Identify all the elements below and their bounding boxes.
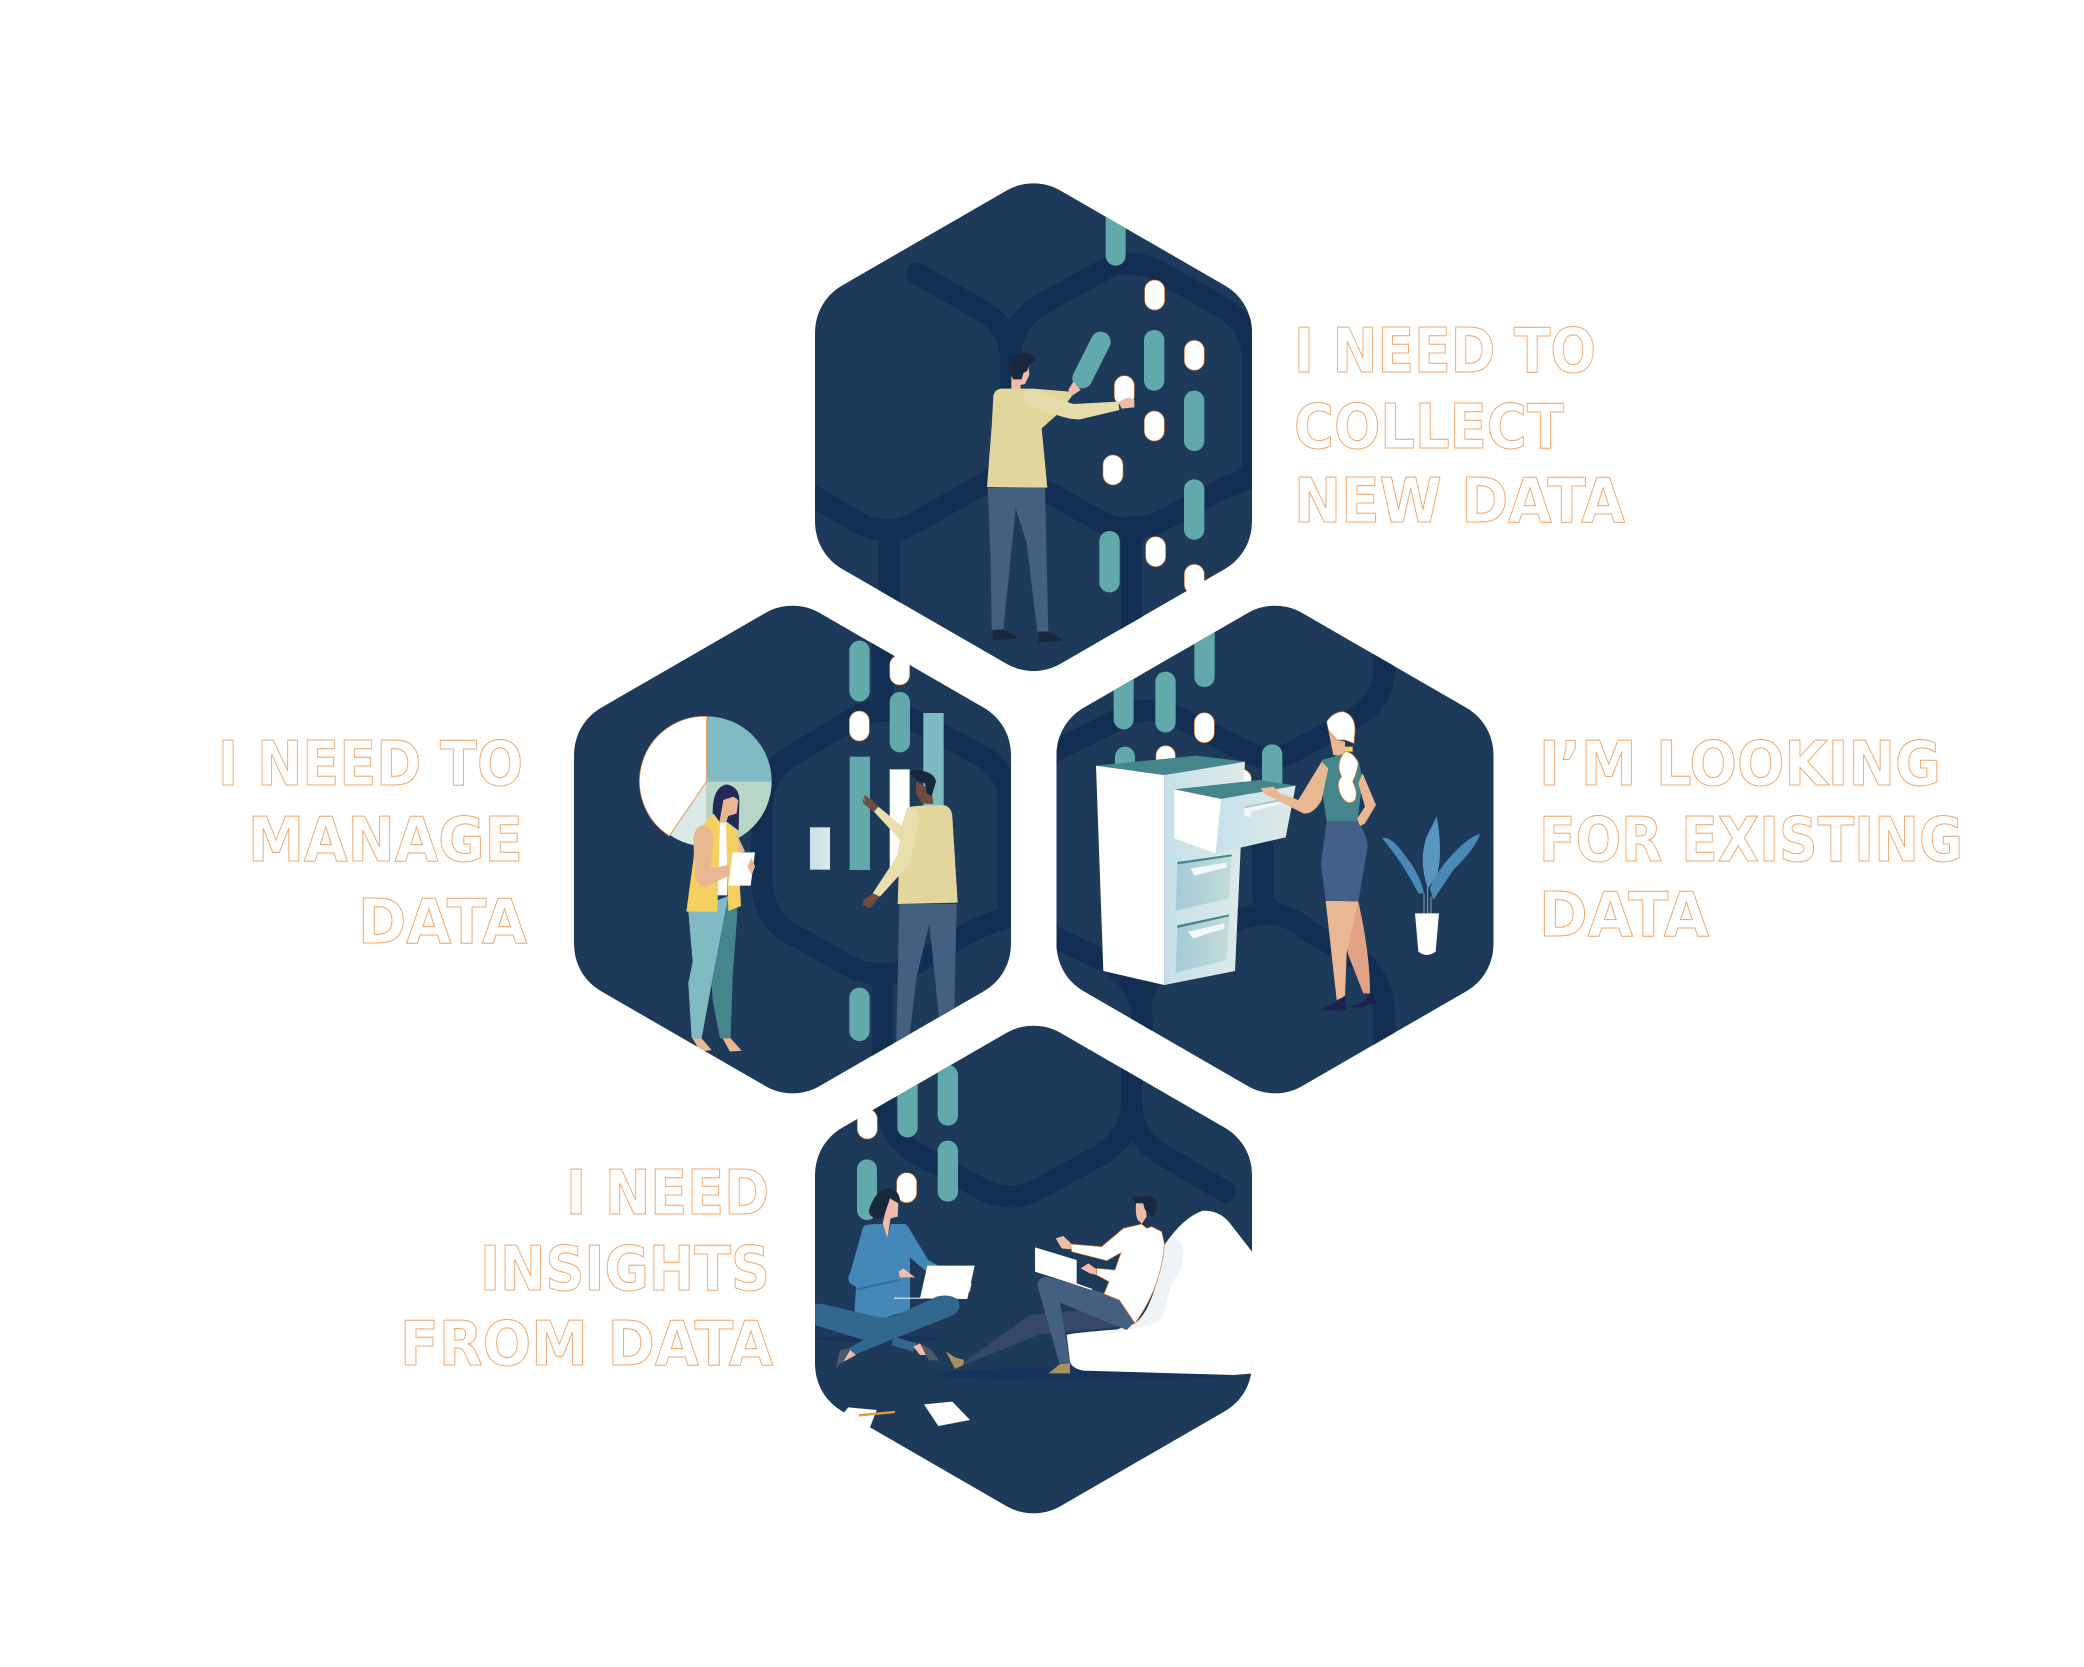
heading: I need to collect new data: NEW DATA: [1294, 465, 1625, 537]
filing cabinet: [1096, 756, 1296, 985]
panel: hexagon insights from data: [813, 1026, 1253, 1513]
heading: I need insights from data: INSIGHTS: [480, 1233, 770, 1305]
teal pills: [1114, 620, 1282, 794]
pie chart: [639, 716, 772, 846]
heading: I need insights from data: [400, 1157, 773, 1380]
heading: I'm looking for existing data: DATA: [1539, 879, 1709, 951]
light teal bar: [923, 713, 944, 810]
panel: hexagon manage data: [574, 606, 1011, 1093]
bean bag: [1067, 1211, 1253, 1375]
background honeycomb lines: [800, 264, 1253, 640]
white pills: [857, 1109, 917, 1203]
woman with ponytail: [1261, 712, 1376, 1011]
heading: I'm looking for existing data: FOR EXISTING: [1539, 804, 1963, 876]
panel: hexagon collect new data: [800, 183, 1253, 671]
heading: I need to collect new data: COLLECT: [1294, 391, 1564, 463]
heading: I need to manage data: DATA: [358, 886, 527, 958]
white data pills: [1103, 280, 1204, 594]
background honeycomb lines: [1043, 643, 1384, 1060]
heading: I'm looking for existing data: I’M LOOKING: [1539, 728, 1941, 800]
heading: I need to manage data: MANAGE: [248, 804, 523, 876]
papers and pencil on floor: [843, 1402, 970, 1427]
heading: I'm looking for existing data: [1539, 728, 1963, 951]
heading: I need insights from data: FROM DATA: [400, 1308, 773, 1380]
white pills: [1156, 713, 1251, 799]
white pills and bar: [849, 655, 910, 869]
background honeycomb lines: [883, 1053, 1225, 1197]
man placing a data pill: [987, 342, 1134, 642]
background honeycomb lines: [762, 633, 1008, 1073]
potted plant: [1382, 817, 1480, 955]
heading: I need to manage data: I NEED TO: [218, 728, 523, 800]
seated woman with laptop: [815, 1188, 975, 1367]
heading: I need to collect new data: I NEED TO: [1294, 315, 1596, 387]
heading: I need insights from data: I NEED: [566, 1157, 769, 1229]
woman with tablet: [686, 784, 755, 1052]
man pointing at chart: [862, 770, 958, 1053]
panel: hexagon looking for existing data: [1043, 606, 1493, 1093]
teal data pills: [1099, 200, 1204, 592]
heading: I need to manage data: [218, 728, 527, 958]
teal pills: [857, 1065, 958, 1220]
teal pills and bars: [849, 641, 910, 1041]
floor shadows: [813, 1336, 1230, 1381]
heading: I need to collect new data: [1294, 315, 1625, 537]
pale bar: [810, 827, 830, 870]
seated man with laptop: [946, 1196, 1164, 1373]
